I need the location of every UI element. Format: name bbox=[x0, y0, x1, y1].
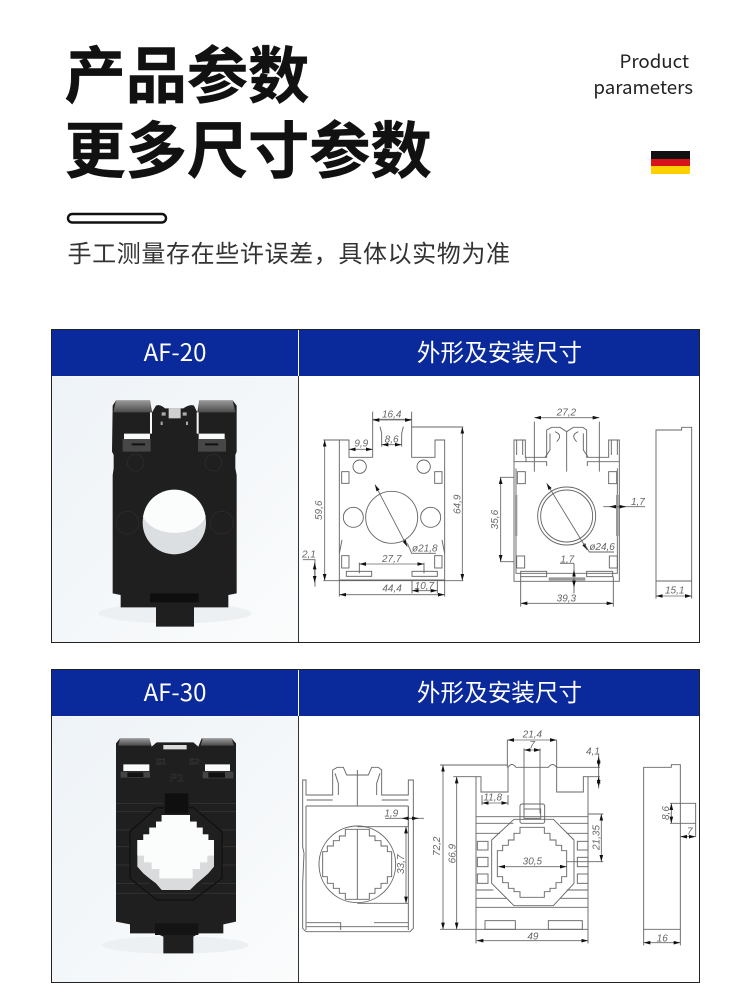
drawing: front view with dimensions: 44,4 bbox=[382, 583, 402, 594]
english subtitle bbox=[593, 47, 693, 100]
drawing: front view with dimensions: 2,1 bbox=[301, 549, 316, 560]
photo: AF-30 transformer: S1 bbox=[156, 756, 167, 766]
drawing: side view with dimensions bbox=[644, 765, 696, 945]
header bar AF-30 bbox=[52, 670, 699, 716]
header bar AF-20 bbox=[52, 330, 699, 376]
drawing: rear view with dimensions: 27,2 bbox=[556, 408, 577, 419]
note text: 手工测量存在些许误差，具体以实物为准 bbox=[68, 234, 511, 269]
drawing: front view with dimensions: 27,7 bbox=[381, 554, 402, 565]
photo: AF-20 transformer bbox=[52, 376, 298, 642]
drawing: front view with dimensions bbox=[432, 729, 603, 943]
drawing: front view with dimensions: 49 bbox=[527, 931, 539, 942]
stepped opening bbox=[137, 815, 214, 890]
title bbox=[64, 26, 432, 190]
drawing: front view with dimensions: 7 bbox=[529, 740, 535, 751]
header bar AF-30: 外形及安装尺寸 bbox=[417, 674, 582, 708]
drawing: front view with dimensions: 21,4 bbox=[522, 729, 543, 740]
drawing: front view with dimensions: 4,1 bbox=[586, 746, 600, 757]
drawing: rear view with dimensions: 1,9 bbox=[384, 808, 399, 819]
drawing: rear view with dimensions: 33,7 bbox=[396, 854, 407, 874]
english subtitle: parameters bbox=[593, 73, 693, 100]
drawing: front view with dimensions: 16,4 bbox=[382, 410, 402, 421]
drawing: side view with dimensions: 16 bbox=[657, 933, 668, 944]
drawing: rear view with dimensions bbox=[500, 408, 645, 607]
drawing: rear view with dimensions: 39,3 bbox=[557, 594, 577, 605]
photo: AF-30 transformer bbox=[52, 716, 298, 982]
drawing: front view with dimensions: 10,7 bbox=[415, 581, 435, 592]
drawing: front view with dimensions: 21,35 bbox=[591, 825, 602, 851]
header bar AF-20: 外形及安装尺寸 bbox=[417, 334, 582, 368]
drawing: front view with dimensions: 30,5 bbox=[523, 856, 543, 867]
photo: AF-30 transformer: P1 bbox=[170, 773, 184, 785]
drawing: front view with dimensions: 66,9 bbox=[447, 843, 458, 863]
photo: AF-30 transformer: S2 bbox=[189, 756, 200, 766]
drawing: front view with dimensions: 59,6 bbox=[314, 500, 325, 520]
drawing: front view with dimensions: 11,8 bbox=[483, 792, 502, 803]
header bar AF-20: AF-20 bbox=[144, 333, 206, 368]
drawing: front view with dimensions: 72,2 bbox=[432, 836, 443, 856]
drawing: front view with dimensions: 8,6 bbox=[385, 435, 399, 446]
drawing: front view with dimensions: 9,9 bbox=[354, 438, 369, 449]
title: 更多尺寸参数 bbox=[64, 102, 432, 190]
drawing: side view with dimensions bbox=[656, 427, 692, 599]
drawing: front view with dimensions: 64,9 bbox=[452, 494, 463, 514]
drawing: side view with dimensions: 7 bbox=[687, 827, 693, 838]
panel: AF-20 bbox=[52, 330, 700, 642]
drawing: 35,6 dimension label: 35,6 bbox=[490, 509, 501, 529]
drawing: side view with dimensions: 15,1 bbox=[665, 586, 684, 597]
decorative pill bbox=[68, 214, 166, 222]
title: 产品参数 bbox=[64, 26, 309, 116]
drawing: rear view with dimensions: 1,7 bbox=[560, 554, 575, 565]
panel: AF-30 bbox=[52, 670, 700, 982]
drawing: rear view with dimensions: 1,7 bbox=[631, 497, 645, 508]
divider bbox=[298, 376, 299, 642]
icon: german flag bbox=[651, 151, 690, 174]
drawing: rear view with dimensions bbox=[303, 767, 424, 932]
header bar AF-30: AF-30 bbox=[144, 673, 206, 708]
drawing: front view with dimensions: ø21,8 bbox=[412, 543, 438, 554]
drawing: rear view with dimensions: ø24,6 bbox=[589, 542, 615, 553]
drawing: side view with dimensions: 8,6 bbox=[661, 806, 672, 820]
english subtitle: Product bbox=[620, 47, 689, 74]
drawing: front view with dimensions bbox=[301, 410, 463, 597]
divider bbox=[298, 716, 299, 982]
